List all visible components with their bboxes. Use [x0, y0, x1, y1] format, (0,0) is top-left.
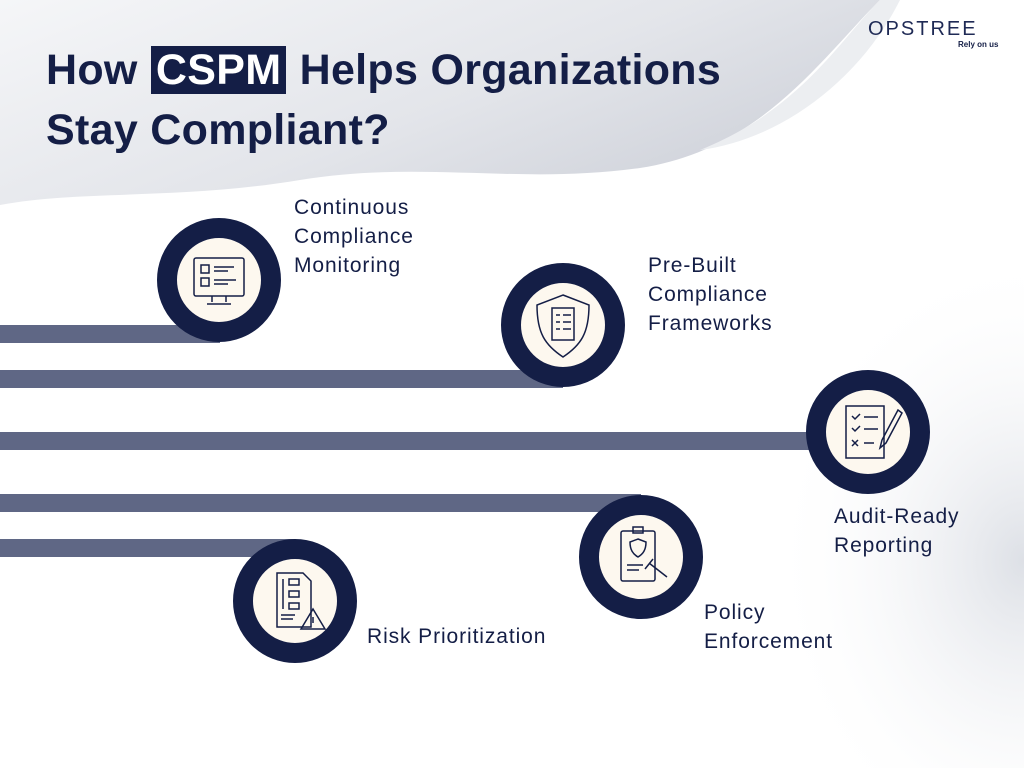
node: Continuous Compliance Monitoring: [157, 218, 281, 342]
label: [834, 505, 959, 557]
logo: OPSTREE: [868, 18, 978, 40]
label: Pre-Built: [648, 254, 737, 277]
label: Audit-Ready: [834, 505, 959, 528]
label: Compliance: [294, 225, 414, 248]
label: Monitoring: [294, 254, 401, 277]
label: Policy: [704, 601, 765, 624]
node: Audit-Ready Reporting: [806, 370, 930, 494]
node: Pre-Built Compliance Frameworks: [501, 263, 625, 387]
logo: [868, 18, 998, 49]
label: Frameworks: [648, 312, 773, 335]
logo: Rely on us: [958, 40, 998, 49]
title: Stay Compliant?: [46, 106, 390, 154]
label: Risk Prioritization: [367, 625, 546, 648]
label: Enforcement: [704, 630, 833, 653]
title: [46, 46, 721, 154]
label: [704, 601, 833, 653]
bars: [0, 325, 220, 343]
label: [648, 254, 773, 335]
label: [294, 196, 414, 277]
node: Risk Prioritization: [233, 539, 357, 663]
label: Reporting: [834, 534, 933, 557]
node: Policy Enforcement: [579, 495, 703, 619]
title: How CSPM Helps Organizations: [46, 46, 721, 94]
label: Continuous: [294, 196, 409, 219]
label: Compliance: [648, 283, 768, 306]
